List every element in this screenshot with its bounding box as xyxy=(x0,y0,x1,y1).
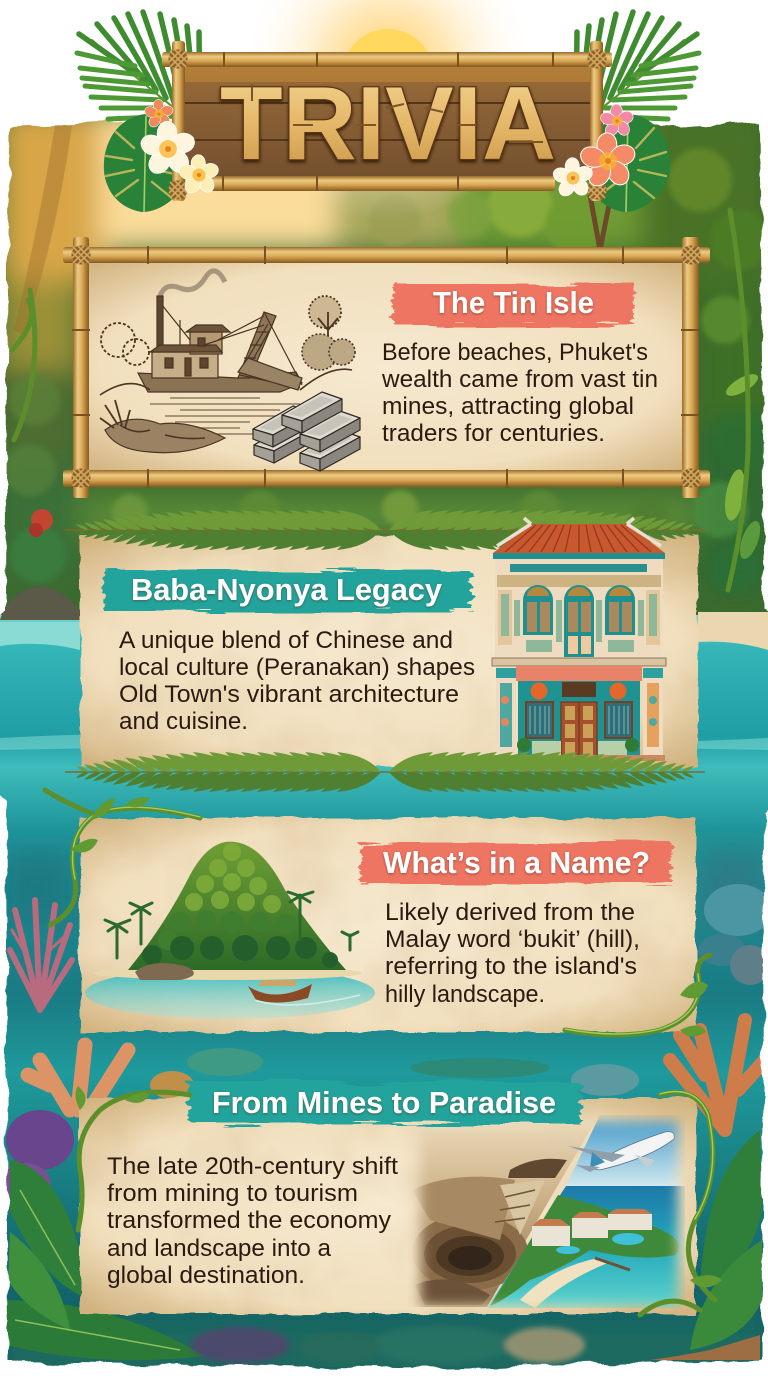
palm fronds xyxy=(77,12,699,128)
coral: left orange xyxy=(28,1045,263,1110)
body text: transformed the economy xyxy=(107,1207,392,1234)
coral: mid reef xyxy=(410,1058,639,1096)
jungle leaves right xyxy=(722,370,764,562)
monstera leaves xyxy=(104,114,670,212)
title sign xyxy=(77,12,699,212)
green headland and resort xyxy=(490,1195,679,1308)
body text: mines, attracting global xyxy=(382,393,634,420)
body text: and landscape into a xyxy=(107,1235,331,1262)
sepia tin mine xyxy=(412,1126,589,1307)
body text xyxy=(119,627,475,735)
body text: local culture (Peranakan) shapes xyxy=(119,654,475,681)
wooden plank board xyxy=(185,66,590,176)
heading ribbon xyxy=(392,283,634,326)
body text: global destination. xyxy=(107,1262,305,1289)
coral: left pink fan xyxy=(10,900,72,1010)
body text: Old Town's vibrant architecture xyxy=(119,681,459,708)
body text: A unique blend of Chinese and xyxy=(119,627,453,654)
parchment xyxy=(80,818,696,1032)
big left tropical leaves xyxy=(6,1160,205,1360)
body text: wealth came from vast tin xyxy=(381,366,658,393)
body text xyxy=(107,1153,398,1289)
heading: Baba-Nyonya Legacy xyxy=(131,572,443,607)
bamboo frame xyxy=(63,237,710,498)
heading: The Tin Isle xyxy=(433,285,594,320)
illustration: silver tin ingots xyxy=(253,392,360,471)
body text: hilly landscape. xyxy=(385,981,545,1008)
body text: traders for centuries. xyxy=(382,420,605,447)
red jungle flower xyxy=(29,509,53,537)
body text: The late 20th-century shift xyxy=(107,1153,398,1180)
body text: referring to the island's xyxy=(385,953,637,980)
body text xyxy=(381,339,658,447)
title: TRIVIA xyxy=(220,66,556,182)
heading ribbon xyxy=(361,842,671,884)
body text: Likely derived from the xyxy=(385,899,635,926)
leaf garland: top xyxy=(65,510,705,550)
plumeria flowers right xyxy=(551,104,637,199)
airplane xyxy=(568,1132,674,1172)
body text: and cuisine. xyxy=(119,708,248,735)
panel: The Tin Isle xyxy=(63,237,710,498)
illustration: tin dredge sketch xyxy=(100,271,355,453)
body text xyxy=(385,899,640,1008)
body text: Malay word ‘bukit’ (hill), xyxy=(385,926,640,953)
parchment xyxy=(80,1098,696,1314)
heading: What’s in a Name? xyxy=(383,845,650,880)
parchment xyxy=(86,260,686,474)
heading ribbon xyxy=(189,1082,581,1124)
body text: Before beaches, Phuket's xyxy=(382,339,648,366)
panel: From Mines to Paradise xyxy=(80,1082,696,1314)
illustration: Peranakan shophouse xyxy=(492,518,666,761)
bamboo frame xyxy=(162,41,612,201)
vines xyxy=(12,210,748,1315)
heading ribbon xyxy=(104,570,471,611)
coral: right teal cluster xyxy=(698,884,768,985)
sky xyxy=(566,1115,685,1186)
bottom reef strip xyxy=(190,1325,585,1365)
parchment xyxy=(80,535,698,767)
illustration: jungle island and long-tail boat xyxy=(85,842,375,1019)
leaf garland: bottom xyxy=(65,752,705,792)
sun and glow xyxy=(238,0,538,220)
panel: Baba-Nyonya Legacy xyxy=(65,510,705,767)
body text: from mining to tourism xyxy=(107,1180,358,1207)
plumeria flowers left xyxy=(138,99,220,196)
coral: left purple xyxy=(0,1110,74,1207)
big right tropical leaves xyxy=(650,1130,762,1360)
sea xyxy=(487,1186,685,1308)
panel: What's in a Name? xyxy=(80,818,696,1032)
illustration: mine to resort split scene xyxy=(408,1113,685,1308)
heading: From Mines to Paradise xyxy=(212,1085,556,1120)
coral: right orange xyxy=(670,1020,765,1130)
